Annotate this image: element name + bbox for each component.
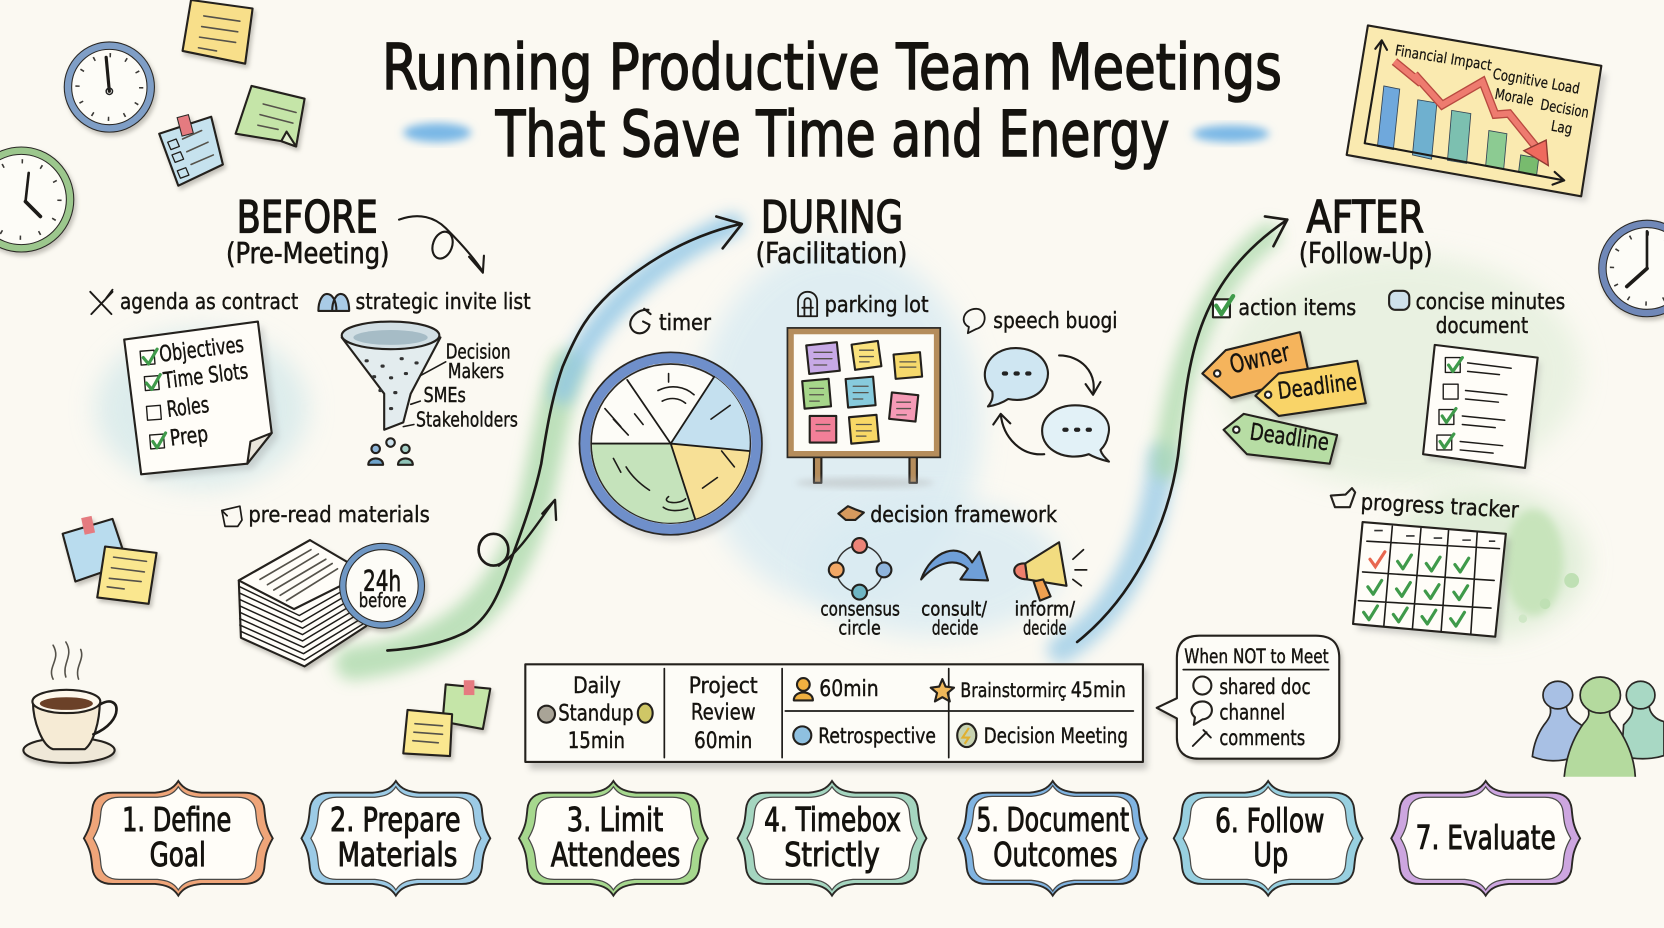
minutes document	[1423, 345, 1541, 473]
paper stack	[239, 540, 366, 666]
table cell: project review: Project	[689, 673, 758, 699]
table cell: decision meeting	[957, 724, 1128, 749]
sticky note: yellow top	[183, 0, 253, 64]
step badge 4: timebox strictly: Strictly	[784, 835, 880, 874]
step badge 5: document outcomes: 5. Document	[976, 800, 1129, 839]
title	[382, 31, 1282, 172]
step badge 6: follow up: 6. Follow	[1215, 801, 1324, 840]
arrow: before loop	[399, 216, 484, 273]
callout: when not to meet: comments	[1219, 726, 1305, 751]
funnel with labels: Stakeholders	[416, 408, 518, 432]
chart note: hidden costs: Cognitive Load	[1491, 65, 1581, 98]
coffee cup	[23, 642, 117, 763]
clock: blue top-left	[64, 42, 154, 132]
funnel with labels	[342, 322, 518, 432]
title: That Save Time and Energy	[495, 98, 1169, 172]
label: concise minutes document	[1389, 289, 1565, 339]
clock: 24h before	[340, 543, 425, 628]
table cell: project review: Review	[691, 699, 756, 725]
progress tracker grid	[1353, 522, 1510, 643]
chart note: hidden costs: Lag	[1550, 117, 1574, 138]
meeting types table	[525, 664, 1147, 769]
callout: when not to meet: shared doc	[1219, 675, 1311, 700]
timer clock with segments	[579, 352, 765, 541]
table cell: brainstorming: 45min	[1071, 678, 1126, 703]
tags: owner and deadline	[1202, 332, 1366, 464]
chart note: hidden costs: Morale	[1493, 85, 1535, 109]
funnel with labels: SMEs	[423, 383, 466, 407]
agenda checklist sheet: Prep	[168, 421, 210, 452]
callout: when not to meet: channel	[1219, 700, 1285, 725]
step badge 2: prepare materials	[301, 781, 490, 896]
step badge 1: define goal: Goal	[150, 835, 206, 874]
agenda checklist sheet: Objectives	[158, 332, 245, 368]
label: speech bubble: speech buogi	[993, 308, 1117, 334]
table cell: decision meeting: Decision Meeting	[984, 724, 1128, 749]
consult/decide arrow	[921, 551, 988, 640]
label: timer: timer	[659, 310, 712, 336]
funnel with labels: Decision	[446, 340, 510, 364]
table cell: brainstorming: Brainstormirç	[960, 679, 1067, 702]
label: timer	[630, 309, 712, 336]
chart note: hidden costs: Financial Impact	[1394, 41, 1493, 74]
tags: owner and deadline: Deadline	[1276, 367, 1358, 405]
label: action items: action items	[1238, 295, 1356, 321]
funnel with labels: Makers	[448, 359, 504, 383]
table cell: project review: 60min	[694, 728, 752, 754]
megaphone inform/decide	[1014, 542, 1087, 640]
callout: when not to meet: When NOT to Meet	[1184, 645, 1329, 668]
sticky notes: near table	[403, 680, 490, 756]
tags: owner and deadline: Owner	[1227, 337, 1293, 380]
step badge 5: document outcomes	[958, 781, 1147, 896]
table cell: 60min	[794, 676, 879, 702]
label: agenda as contract: agenda as contract	[120, 289, 298, 315]
heading: DURING: (Facilitation)	[756, 236, 907, 270]
heading: BEFORE	[226, 191, 389, 270]
step badge 3: limit attendees: Attendees	[551, 835, 680, 874]
step badge 4: timebox strictly: 4. Timebox	[764, 800, 901, 839]
table cell: daily standup: Daily	[573, 673, 621, 699]
heading: AFTER: (Follow-Up)	[1299, 236, 1433, 270]
agenda checklist sheet: Roles	[165, 392, 211, 423]
arrow: during to after	[1077, 216, 1287, 642]
table cell: retrospective	[793, 724, 936, 749]
consensus circle	[820, 538, 900, 640]
step badge 4: timebox strictly	[738, 781, 926, 896]
consult/decide arrow: decide	[932, 617, 978, 640]
step badge 3: limit attendees: 3. Limit	[567, 800, 663, 839]
consult/decide arrow: consult/	[921, 597, 987, 620]
step badge 7: evaluate: 7. Evaluate	[1416, 818, 1556, 857]
step badge 7: evaluate	[1391, 781, 1580, 896]
heading: DURING	[756, 191, 907, 270]
label: strategic invite list: strategic invite list	[356, 289, 531, 315]
sticky note: blue checklist	[159, 115, 223, 186]
step badge 3: limit attendees	[519, 781, 708, 896]
megaphone inform/decide: inform/	[1015, 597, 1076, 620]
step badge 6: follow up: Up	[1253, 835, 1288, 874]
label: pre-read materials: pre-read materials	[248, 502, 430, 528]
label: speech bubble	[964, 308, 1117, 334]
heading: BEFORE: BEFORE	[237, 191, 378, 243]
table cell: daily standup: Standup	[558, 701, 634, 727]
label: progress tracker: progress tracker	[1360, 489, 1520, 524]
label: decision framework: decision framework	[870, 502, 1057, 528]
table cell: brainstorming	[931, 678, 1126, 703]
clock: green left	[0, 147, 74, 252]
heading: BEFORE: (Pre-Meeting)	[226, 236, 389, 270]
clock: blue right	[1599, 220, 1664, 317]
consensus circle: circle	[838, 617, 881, 640]
table cell: daily standup	[538, 673, 653, 754]
table cell: 60min: 60min	[819, 676, 879, 702]
background watercolor washes	[96, 123, 1586, 663]
label: parking lot: parking lot	[825, 292, 929, 318]
heading: DURING: DURING	[761, 191, 903, 243]
tags: owner and deadline: Deadline	[1248, 418, 1331, 456]
table cell: retrospective: Retrospective	[818, 724, 936, 749]
label: concise minutes document: document	[1436, 313, 1528, 339]
arrow: before to during	[387, 216, 742, 651]
megaphone inform/decide: decide	[1023, 617, 1067, 640]
step badge 2: prepare materials: Materials	[337, 835, 457, 874]
title: Running Productive Team Meetings	[382, 31, 1282, 105]
table cell: project review	[689, 673, 758, 754]
agenda checklist sheet	[124, 322, 278, 480]
chart note: hidden costs: Decision	[1539, 96, 1590, 122]
agenda checklist sheet: Time Slots	[161, 358, 250, 394]
step badge 1: define goal: 1. Define	[122, 800, 231, 839]
chart note: hidden costs	[1347, 25, 1607, 202]
clock: 24h before: before	[359, 589, 406, 612]
heading: AFTER	[1299, 191, 1433, 270]
icon: attendee group	[368, 438, 413, 465]
step badge 6: follow up	[1174, 781, 1363, 896]
sticky note: green	[236, 86, 305, 146]
callout: when not to meet	[1157, 636, 1339, 759]
consensus circle: consensus	[820, 597, 900, 620]
table cell: daily standup: 15min	[568, 728, 625, 754]
step badge 1: define goal	[84, 781, 273, 896]
label: concise minutes document: concise minutes	[1416, 289, 1565, 315]
parking lot board	[787, 328, 940, 488]
heading: AFTER: AFTER	[1306, 191, 1424, 243]
people group	[1532, 677, 1664, 777]
sticky notes: left blue and yellow	[63, 516, 157, 604]
clock: 24h before: 24h	[363, 564, 401, 598]
step badge 5: document outcomes: Outcomes	[993, 835, 1117, 874]
speech bubbles cycle	[985, 348, 1109, 462]
step badge 2: prepare materials: 2. Prepare	[330, 800, 461, 839]
